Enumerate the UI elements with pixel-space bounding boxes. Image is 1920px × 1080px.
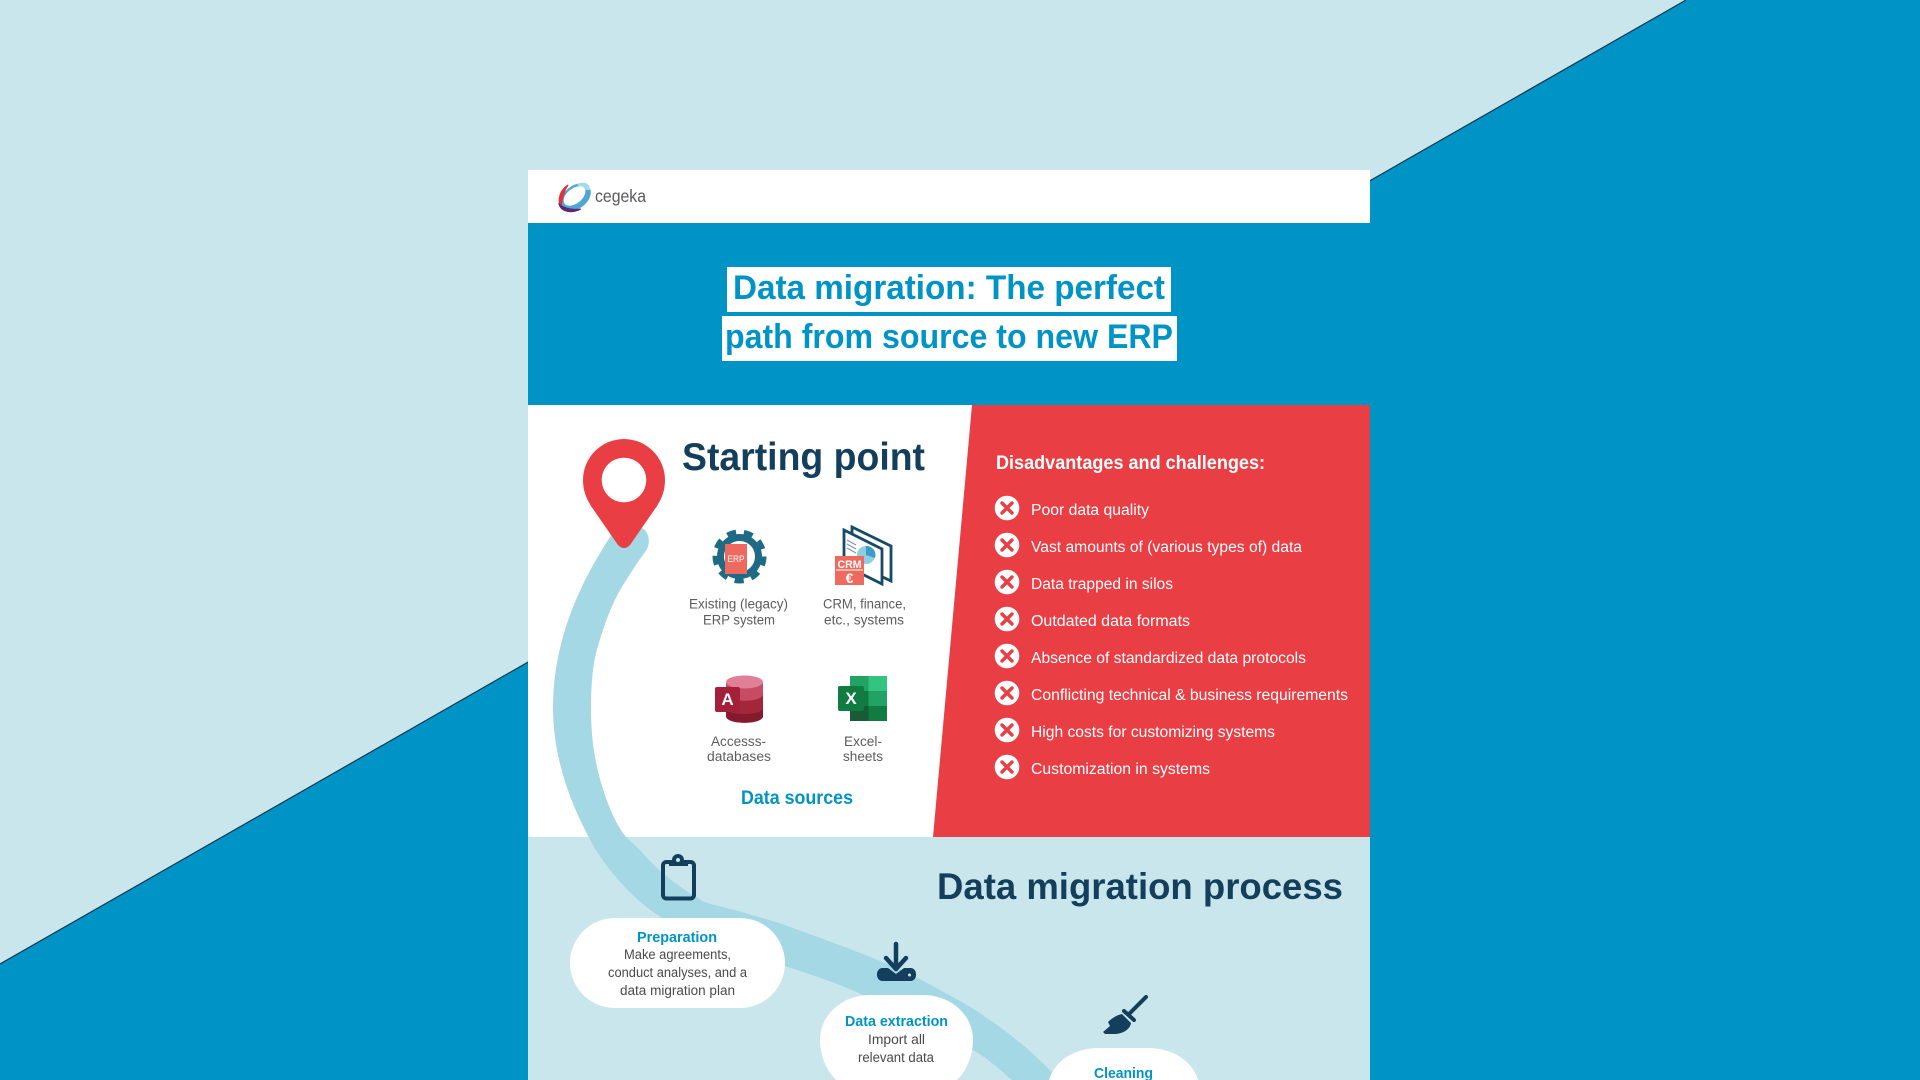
label: etc., systems bbox=[824, 612, 904, 628]
icon: location pin bbox=[583, 439, 665, 548]
migration path bbox=[553, 525, 1060, 1080]
pill: preparation: conduct analyses, and a bbox=[608, 965, 747, 980]
pill: data extraction: relevant data bbox=[858, 1050, 934, 1065]
step: preparation bbox=[570, 854, 785, 1008]
pill: data extraction bbox=[820, 995, 973, 1080]
icon: gear: ERP bbox=[728, 554, 744, 564]
list item: protocols bbox=[995, 644, 1306, 668]
panel: data migration process background bbox=[528, 837, 1370, 1080]
list item: customization: Customization in systems bbox=[1031, 761, 1210, 778]
label bbox=[843, 734, 883, 764]
label: ERP system bbox=[703, 612, 775, 628]
panel: logo bar bbox=[528, 170, 1370, 223]
data source: Excel sheets bbox=[838, 676, 887, 764]
title: Data migration: The perfect bbox=[733, 269, 1165, 307]
icon: download bbox=[877, 944, 916, 981]
label: databases bbox=[707, 749, 771, 764]
pill: data extraction: Data extraction bbox=[845, 1013, 948, 1030]
title bbox=[725, 269, 1173, 356]
label: Excel- bbox=[844, 734, 882, 749]
icon: CRM documents bbox=[835, 527, 891, 586]
label: Accesss- bbox=[711, 734, 766, 749]
label: CRM, finance, bbox=[823, 596, 906, 612]
list item: outdated formats: Outdated data formats bbox=[1031, 613, 1190, 630]
data source: Access databases bbox=[707, 676, 771, 764]
label bbox=[689, 596, 788, 628]
icon: CRM documents: CRM bbox=[838, 559, 862, 571]
step: cleaning bbox=[1049, 997, 1198, 1080]
pill: preparation: Preparation bbox=[637, 929, 717, 946]
starting point heading: Starting point bbox=[682, 436, 925, 479]
label: Existing (legacy) bbox=[689, 596, 788, 612]
data source: ERP system bbox=[689, 532, 788, 628]
panel: disadvantages and challenges bbox=[933, 405, 1370, 837]
label bbox=[707, 734, 771, 764]
data source: CRM and finance bbox=[823, 527, 906, 628]
list item: conflicting requirements: Conflicting technical & business requirements bbox=[1031, 687, 1348, 704]
label: sheets bbox=[843, 749, 883, 764]
list item: poor data quality: Poor data quality bbox=[1031, 502, 1149, 519]
pill: preparation bbox=[570, 918, 785, 1008]
panel: starting point bbox=[528, 405, 1370, 837]
list item: silos bbox=[995, 570, 1173, 594]
icon: clipboard bbox=[663, 854, 694, 898]
icon: CRM documents: € bbox=[846, 570, 854, 586]
list item: vast amounts: Vast amounts of (various types of) data bbox=[1031, 539, 1302, 556]
process heading: Data migration process bbox=[937, 866, 1343, 907]
list item: conflicting requirements bbox=[995, 681, 1348, 705]
list item: poor data quality bbox=[995, 496, 1149, 520]
label bbox=[823, 596, 906, 628]
disadvantages heading: Disadvantages and challenges: bbox=[996, 452, 1265, 474]
data sources caption: Data sources bbox=[741, 788, 853, 809]
icon: Excel: X bbox=[845, 689, 857, 708]
list item: vast amounts bbox=[995, 533, 1302, 557]
icon: broom bbox=[1103, 997, 1146, 1034]
logo wordmark: cegeka bbox=[595, 186, 646, 206]
pill: preparation: Make agreements, bbox=[624, 947, 731, 962]
list item: high costs bbox=[995, 718, 1275, 742]
panel: title band bbox=[528, 223, 1370, 405]
icon: cegeka logo bbox=[556, 178, 596, 216]
list item: high costs: High costs for customizing systems bbox=[1031, 724, 1275, 741]
list item: protocols: Absence of standardized data protocols bbox=[1031, 650, 1306, 667]
pill: data extraction: Import all bbox=[868, 1032, 925, 1047]
title: path from source to new ERP bbox=[725, 318, 1173, 356]
list item: customization bbox=[995, 755, 1210, 779]
step: data extraction bbox=[820, 944, 973, 1080]
list item: silos: Data trapped in silos bbox=[1031, 576, 1173, 593]
pill: cleaning bbox=[1049, 1048, 1198, 1080]
list item: outdated formats bbox=[995, 607, 1190, 631]
icon: Access: A bbox=[721, 690, 734, 709]
pill: preparation: data migration plan bbox=[620, 983, 735, 998]
